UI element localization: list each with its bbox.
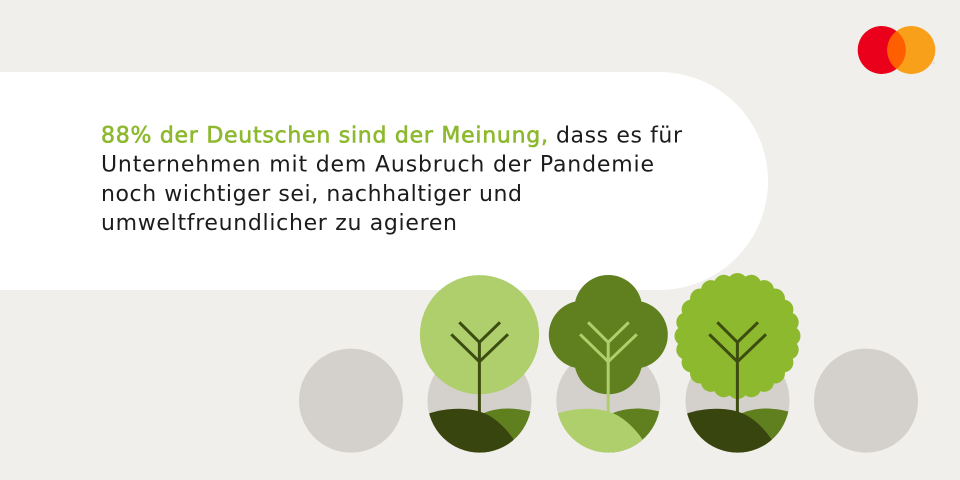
white text panel (0, 72, 768, 290)
line 3: noch wichtiger sei, nachhaltiger und (101, 182, 522, 207)
line 2: Unternehmen mit dem Ausbruch der Pandemie (101, 153, 654, 178)
line 1 continuation: dass es für (556, 124, 683, 148)
mastercard logo (858, 26, 935, 74)
line 4: umweltfreundlicher zu agieren (101, 211, 457, 236)
mastercard logo: ™ (932, 62, 935, 66)
tree 3: scalloped bright green crown (674, 273, 801, 460)
green highlighted statement: 88% der Deutschen sind der Meinung, (101, 124, 548, 148)
tree 1: round light green crown (420, 275, 539, 460)
tree 2: four-lobed dark green crown (549, 275, 668, 460)
empty grey circle left (299, 349, 403, 453)
main statement text (101, 124, 683, 236)
empty grey circle right (814, 349, 918, 453)
